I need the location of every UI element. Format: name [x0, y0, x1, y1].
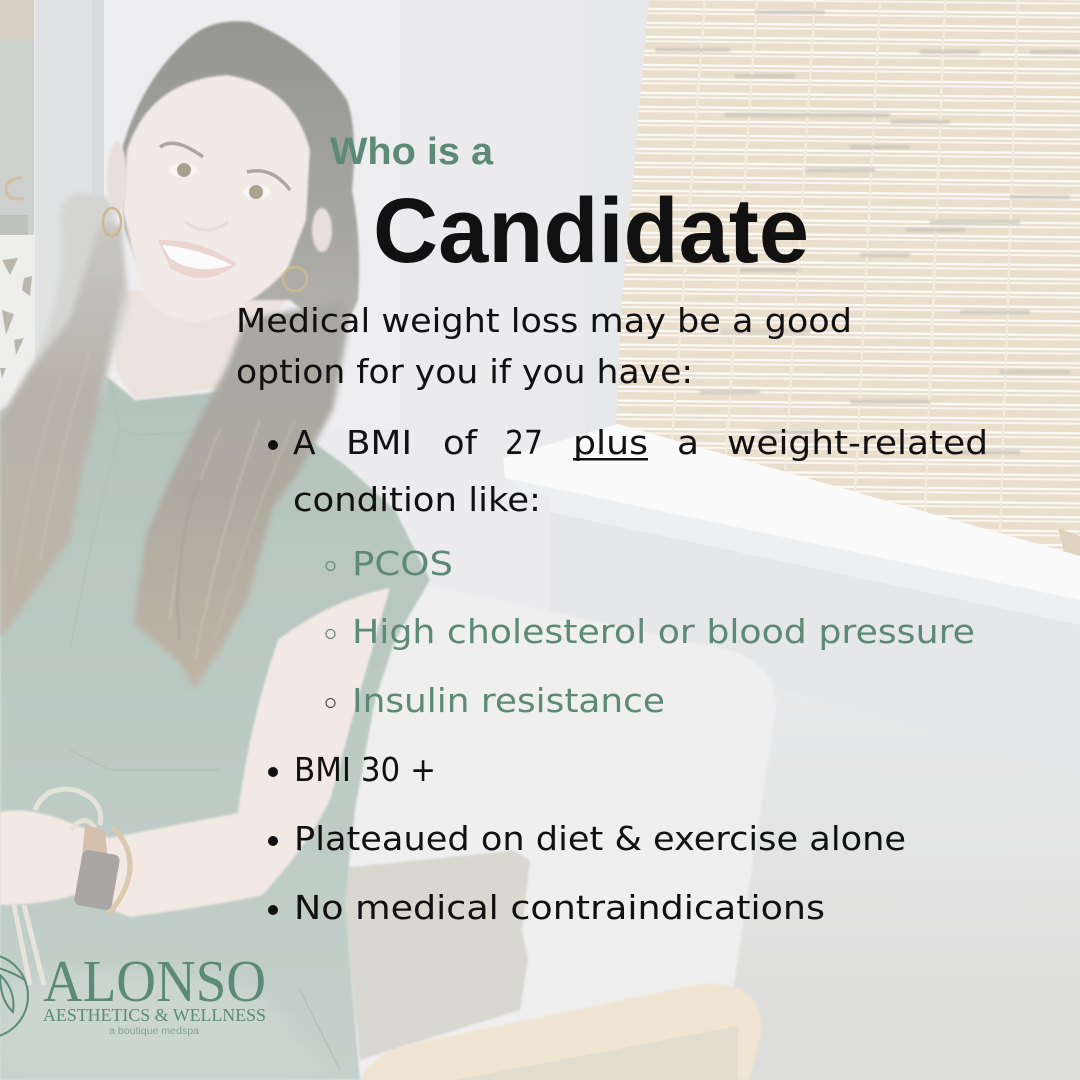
eyes and brows [160, 143, 290, 199]
mouth [158, 240, 237, 278]
window sill [503, 424, 1080, 600]
wispy hair left [0, 193, 130, 420]
pillow [340, 850, 530, 1060]
eyebrow heading: Who is a [330, 131, 494, 173]
intro text: option for you if you have: [236, 352, 693, 391]
bullet 1 BMI of 27 plus condition [268, 423, 988, 519]
main heading: Candidate [373, 180, 809, 282]
hair back and crown [118, 21, 359, 340]
bullet 2 BMI 30: BMI 30 + [294, 750, 436, 789]
window blind [616, 0, 1080, 558]
intro text [236, 301, 852, 391]
photo: woman [0, 21, 430, 1080]
sub-bullet insulin: Insulin resistance [352, 681, 665, 720]
shelf with objects [0, 0, 35, 405]
nose shadow [185, 222, 228, 230]
neck [115, 290, 290, 400]
bullet 1 BMI of 27 plus condition: of [443, 423, 478, 462]
scrunchie [35, 789, 101, 830]
bullet 1 BMI of 27 plus condition: 27 [505, 423, 543, 462]
face [123, 75, 310, 322]
bullet 1 BMI of 27 plus condition: BMI [346, 423, 412, 462]
bullet 1 BMI of 27 plus condition: A [293, 423, 316, 462]
bullet 3 plateaued: Plateaued on diet & exercise alone [294, 819, 906, 858]
arm [0, 588, 390, 917]
hanging tie [14, 905, 44, 985]
bullet 1 BMI of 27 plus condition: a [677, 423, 699, 462]
bullet 1 BMI of 27 plus condition: condition like: [293, 480, 541, 519]
wooden chair arm [360, 984, 762, 1080]
bullet 1 BMI of 27 plus condition: plus [573, 423, 648, 462]
sub-list of conditions [326, 544, 975, 720]
sub-bullet cholesterol: High cholesterol or blood pressure [352, 612, 975, 651]
light skirt area [0, 972, 330, 1080]
dress [0, 375, 430, 1080]
couch back [722, 688, 1080, 1080]
logo: Alonso Aesthetics and Wellness [0, 948, 266, 1038]
sub-bullet PCOS: PCOS [352, 544, 453, 583]
intro text: Medical weight loss may be a good [236, 301, 852, 340]
bullet 4 contraindications: No medical contraindications [294, 888, 825, 927]
logo wordmark: ALONSO [43, 948, 266, 1014]
watch and bracelet [73, 825, 130, 915]
ears [107, 142, 332, 252]
left lock of hair [0, 225, 125, 640]
bullet list [268, 423, 988, 927]
white chair and cushion [340, 578, 776, 1080]
logo emblem [0, 954, 28, 1038]
earrings [103, 208, 307, 291]
hair strands [15, 350, 295, 660]
logo tagline: a boutique medspa [109, 1026, 199, 1037]
bullet 1 BMI of 27 plus condition: weight-related [727, 423, 988, 462]
dress seams [70, 380, 340, 1070]
right lock of hair [133, 300, 347, 690]
logo second line: AESTHETICS & WELLNESS [43, 1005, 266, 1025]
